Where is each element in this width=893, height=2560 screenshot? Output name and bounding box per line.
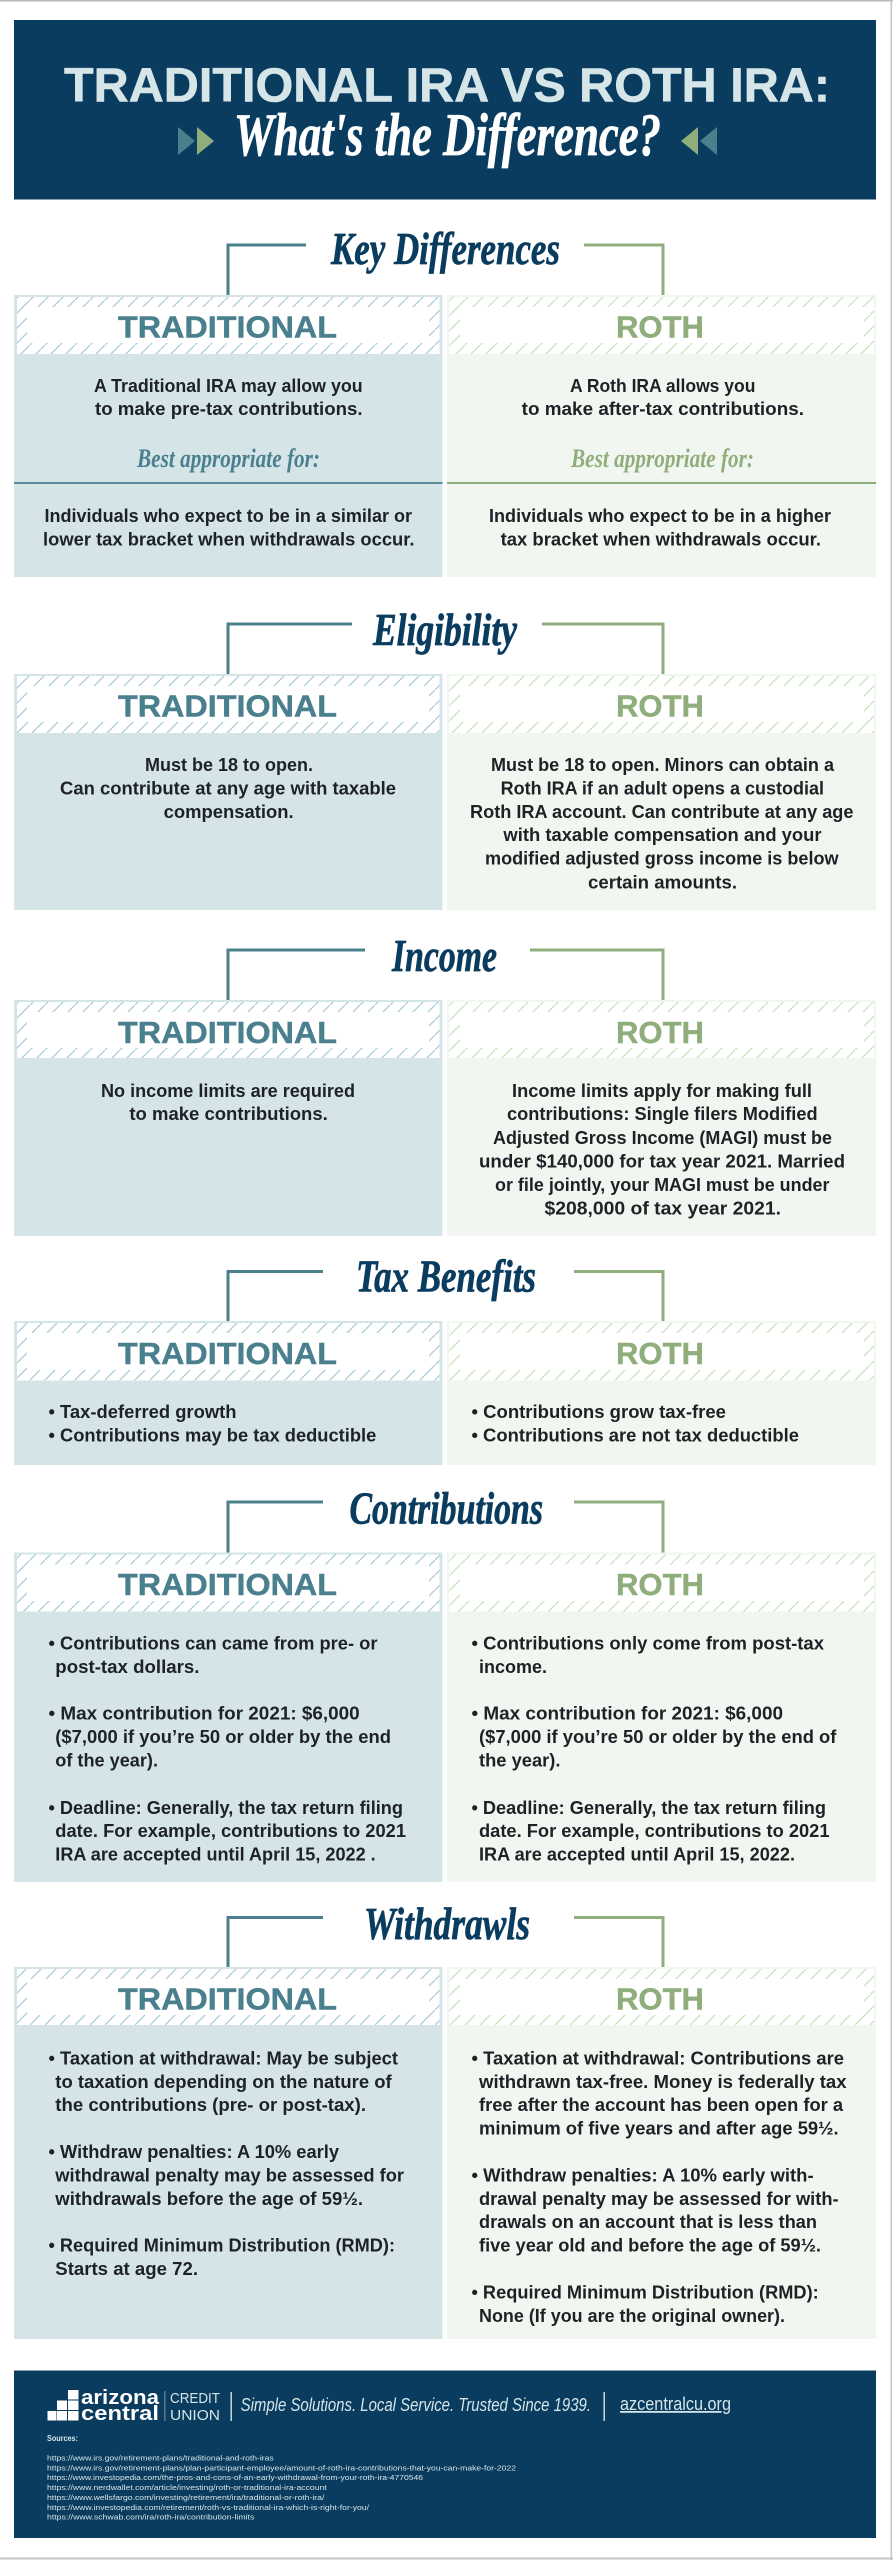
text block: of the year).: [55, 1750, 158, 1770]
text block: drawals on an account that is less than: [479, 2211, 817, 2232]
label: traditional: TRADITIONAL: [118, 1337, 337, 1371]
text block: Individuals who expect to be in a similar or: [44, 505, 412, 526]
footer: [14, 2370, 876, 2538]
text block: Income limits apply for making full: [512, 1080, 812, 1101]
panel: roth: [447, 674, 876, 910]
tagline: Simple Solutions. Local Service. Trusted Since 1939.: [241, 2395, 591, 2415]
label: roth: ROTH: [616, 310, 704, 344]
connector: traditional: [228, 1918, 323, 1967]
text block: Roth IRA account. Can contribute at any age: [470, 801, 854, 822]
text block: Starts at age 72.: [55, 2258, 198, 2279]
connector: roth: [574, 1502, 663, 1552]
text block: • Max contribution for 2021: $6,000: [48, 1702, 360, 1724]
logo: arizona central credit union: [48, 2387, 220, 2425]
text block: the year).: [479, 1750, 560, 1770]
text block: Individuals who expect to be in a higher: [489, 505, 831, 526]
text block: • Required Minimum Distribution (RMD):: [48, 2234, 395, 2256]
panel: traditional: [14, 1967, 442, 2339]
title line 2: What's the Difference?: [234, 102, 661, 168]
text block: drawal penalty may be assessed for with-: [479, 2188, 839, 2209]
text block: [472, 2048, 847, 2326]
text block: [470, 754, 854, 892]
text block: or file jointly, your MAGI must be under: [495, 1174, 830, 1195]
text block: to make after-tax contributions.: [522, 398, 804, 419]
text block: [94, 375, 363, 419]
text block: • Contributions may be tax deductible: [48, 1424, 376, 1446]
text block: • Max contribution for 2021: $6,000: [472, 1702, 783, 1724]
panel: roth: [447, 1321, 876, 1465]
label: traditional: TRADITIONAL: [118, 1568, 337, 1602]
subheading: best appropriate for: Best appropriate for:: [136, 444, 320, 473]
text block: • Contributions only come from post-tax: [472, 1632, 825, 1654]
text block: • Tax-deferred growth: [48, 1401, 236, 1422]
text block: lower tax bracket when withdrawals occur.: [43, 528, 414, 550]
label: roth: ROTH: [616, 1337, 704, 1371]
text block: free after the account has been open for a: [479, 2094, 844, 2115]
connector: roth: [584, 245, 663, 295]
sources: https://www.irs.gov/retirement-plans/plan-participant-employee/amount-of-roth-ira-contributions-that-you-can-make-for-2022: [47, 2464, 516, 2472]
text block: withdrawn tax-free. Money is federally tax: [478, 2071, 847, 2092]
connector: roth: [574, 1918, 663, 1967]
text block: [60, 754, 396, 822]
title line 1: TRADITIONAL IRA VS ROTH IRA:: [64, 60, 830, 112]
label: roth: ROTH: [616, 1568, 704, 1602]
heading: Income: Income: [391, 930, 497, 981]
text block: to taxation depending on the nature of: [55, 2071, 393, 2092]
panel: traditional: [14, 1000, 442, 1236]
text block: contributions: Single filers Modified: [507, 1103, 818, 1124]
text block: [48, 2048, 404, 2279]
sources: https://www.investopedia.com/the-pros-and-cons-of-an-early-withdrawal-from-your-roth-ira-4770546: [47, 2473, 423, 2482]
text block: Roth IRA if an adult opens a custodial: [501, 778, 824, 798]
sources: https://www.schwab.com/ira/roth-ira/contribution-limits: [47, 2512, 255, 2522]
heading: Withdrawls: Withdrawls: [364, 1898, 530, 1949]
icon: staircase squares: [48, 2390, 78, 2420]
text block: five year old and before the age of 59½.: [479, 2234, 821, 2256]
text block: • Withdraw penalties: A 10% early with-: [472, 2164, 814, 2186]
connector: roth: [542, 624, 663, 674]
text block: • Taxation at withdrawal: Contributions are: [472, 2048, 844, 2068]
logo: arizona central credit union: arizona: [81, 2387, 160, 2409]
text block: • Withdraw penalties: A 10% early: [48, 2141, 340, 2162]
sources: [47, 2434, 516, 2522]
heading: Contributions: Contributions: [350, 1482, 543, 1534]
connector: traditional: [228, 245, 306, 295]
text block: A Roth IRA allows you: [570, 375, 755, 396]
subheading: best appropriate for: Best appropriate for:: [570, 444, 754, 473]
text block: minimum of five years and after age 59½.: [479, 2118, 839, 2138]
sources: https://www.investopedia.com/retirement/roth-vs-traditional-ira-which-is-right-for-you/: [47, 2503, 370, 2512]
text block: tax bracket when withdrawals occur.: [501, 528, 821, 550]
text block: [48, 1401, 376, 1446]
text block: • Contributions can came from pre- or: [48, 1632, 378, 1654]
text block: modified adjusted gross income is below: [485, 848, 839, 868]
website link: azcentralcu.org: [620, 2394, 731, 2414]
text block: certain amounts.: [588, 872, 737, 892]
text block: [472, 1632, 837, 1864]
sources: https://www.irs.gov/retirement-plans/traditional-and-roth-iras: [47, 2454, 274, 2462]
text block: Must be 18 to open.: [145, 754, 313, 775]
text block: • Deadline: Generally, the tax return filing: [472, 1797, 826, 1818]
section: Eligibility: [14, 604, 876, 910]
section: Tax Benefits: [14, 1250, 876, 1465]
text block: Must be 18 to open. Minors can obtain a: [491, 754, 835, 775]
panel: roth: [447, 1000, 876, 1236]
text block: None (If you are the original owner).: [479, 2305, 785, 2326]
title banner: [14, 20, 876, 200]
connector: traditional: [228, 624, 352, 674]
text block: [479, 1080, 845, 1218]
text block: • Required Minimum Distribution (RMD):: [472, 2282, 819, 2302]
text block: • Contributions are not tax deductible: [472, 1424, 799, 1446]
text block: date. For example, contributions to 2021: [55, 1820, 406, 1841]
icon: right arrows: [681, 127, 717, 155]
connector: traditional: [228, 950, 365, 1000]
text block: Adjusted Gross Income (MAGI) must be: [493, 1127, 832, 1148]
section: Withdrawls: [14, 1898, 876, 2339]
panel: roth: [447, 1552, 876, 1882]
heading: Key Differences: Key Differences: [330, 223, 560, 274]
panel: traditional: [14, 1321, 442, 1465]
text block: with taxable compensation and your: [502, 824, 822, 845]
text block: ($7,000 if you’re 50 or older by the end of: [479, 1726, 837, 1747]
sources: https://www.wellsfargo.com/investing/retirement/ira/traditional-or-roth-ira/: [47, 2493, 325, 2502]
text block: IRA are accepted until April 15, 2022 .: [55, 1844, 376, 1864]
text block: • Contributions grow tax-free: [472, 1401, 726, 1422]
section: Contributions: [14, 1482, 876, 1882]
text block: compensation.: [164, 801, 294, 822]
text block: A Traditional IRA may allow you: [94, 375, 363, 396]
text block: date. For example, contributions to 2021: [479, 1820, 830, 1841]
heading: Eligibility: Eligibility: [372, 604, 517, 655]
text block: No income limits are required: [101, 1080, 355, 1101]
text block: [48, 1632, 406, 1864]
text block: • Deadline: Generally, the tax return filing: [48, 1797, 403, 1818]
sources: Sources:: [47, 2434, 78, 2443]
text block: to make pre-tax contributions.: [95, 398, 363, 419]
section: Key Differences: [14, 223, 876, 577]
logo: arizona central credit union: CREDIT: [170, 2390, 220, 2407]
label: roth: ROTH: [616, 1982, 704, 2016]
text block: [489, 505, 831, 550]
panel: traditional: [14, 295, 442, 577]
text block: Can contribute at any age with taxable: [60, 778, 396, 798]
label: roth: ROTH: [616, 690, 704, 724]
panel: roth: [447, 1967, 876, 2339]
text block: IRA are accepted until April 15, 2022.: [479, 1844, 795, 1864]
text block: $208,000 of tax year 2021.: [544, 1198, 781, 1218]
text block: [522, 375, 804, 419]
text block: • Taxation at withdrawal: May be subject: [48, 2048, 398, 2068]
label: traditional: TRADITIONAL: [118, 310, 337, 344]
text block: withdrawals before the age of 59½.: [54, 2188, 363, 2209]
section: Income: [14, 930, 876, 1236]
text block: [101, 1080, 355, 1124]
label: traditional: TRADITIONAL: [118, 1982, 337, 2016]
panel: traditional: [14, 674, 442, 910]
label: traditional: TRADITIONAL: [118, 690, 337, 724]
connector: traditional: [228, 1272, 323, 1321]
text block: the contributions (pre- or post-tax).: [55, 2094, 366, 2115]
connector: traditional: [228, 1502, 323, 1552]
label: traditional: TRADITIONAL: [118, 1016, 337, 1050]
heading: Tax Benefits: Tax Benefits: [356, 1250, 536, 1302]
label: roth: ROTH: [616, 1016, 704, 1050]
text block: income.: [479, 1656, 547, 1677]
panel: roth: [447, 295, 876, 577]
text block: withdrawal penalty may be assessed for: [54, 2164, 404, 2186]
text block: [472, 1401, 799, 1446]
text block: post-tax dollars.: [55, 1656, 199, 1677]
logo: arizona central credit union: UNION: [170, 2407, 220, 2424]
text block: to make contributions.: [129, 1103, 328, 1124]
text block: ($7,000 if you’re 50 or older by the end: [55, 1726, 391, 1747]
connector: roth: [574, 1272, 663, 1321]
connector: roth: [530, 950, 663, 1000]
text block: [43, 505, 414, 550]
logo: arizona central credit union: central: [81, 2403, 159, 2425]
panel: traditional: [14, 1552, 442, 1882]
text block: under $140,000 for tax year 2021. Married: [479, 1150, 845, 1172]
sources: https://www.nerdwallet.com/article/investing/roth-or-traditional-ira-account: [47, 2483, 328, 2492]
icon: left arrows: [178, 127, 214, 155]
